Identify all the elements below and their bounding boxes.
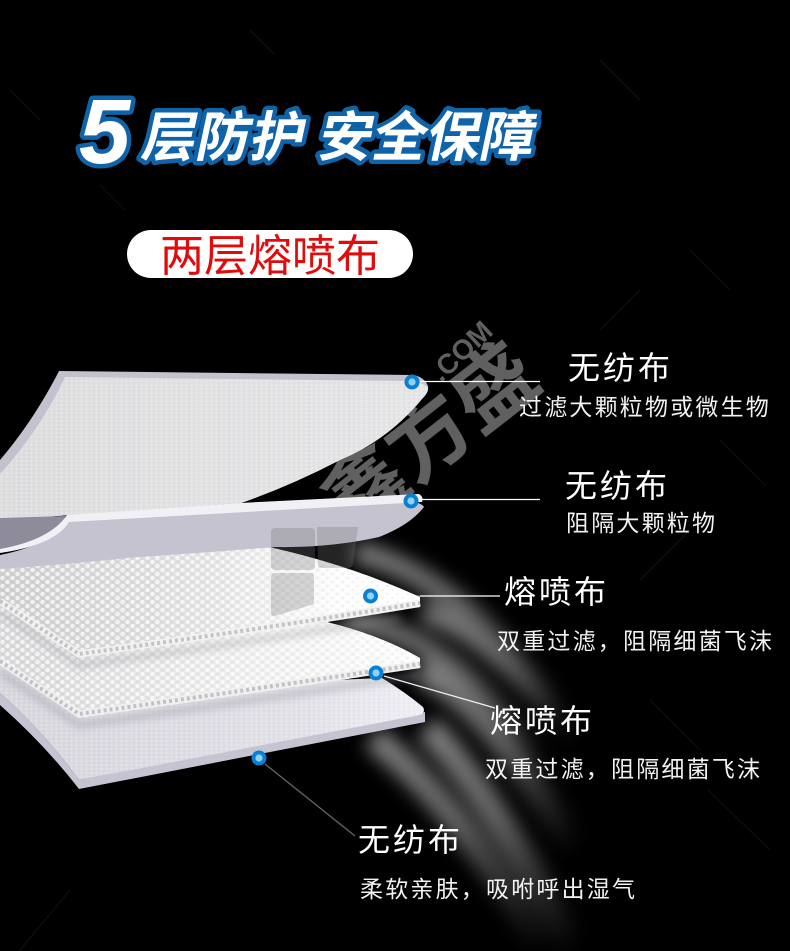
filter window logo squares xyxy=(271,527,358,616)
label: layer 1 xyxy=(519,350,771,420)
label: layer 2: 无纺布 xyxy=(565,468,670,504)
label: layer 4: 双重过滤，阻隔细菌飞沫 xyxy=(485,756,762,782)
numeral 5: 5 xyxy=(79,81,132,183)
title text: 安全保障 xyxy=(313,108,542,168)
label: layer 2: 阻隔大颗粒物 xyxy=(566,510,717,536)
layer 4: melt-blown xyxy=(0,600,420,718)
watermark: .COM xyxy=(424,315,499,387)
leader lines xyxy=(265,382,540,836)
label: layer 3: 熔喷布 xyxy=(504,574,609,610)
layer 2: curved non-woven band xyxy=(0,494,424,569)
label: layer 4: 熔喷布 xyxy=(490,703,595,739)
label: layer 2 xyxy=(565,468,717,536)
pill: two melt-blown layers: 两层熔喷布 xyxy=(160,232,380,281)
layer 1: top curved non-woven xyxy=(0,371,428,520)
label: layer 1: 无纺布 xyxy=(568,350,673,386)
label: layer 4 xyxy=(485,703,762,782)
layer 3: melt-blown xyxy=(0,547,420,658)
label: layer 3: 双重过滤，阻隔细菌飞沫 xyxy=(497,628,774,654)
label: layer 1: 过滤大颗粒物或微生物 xyxy=(519,394,771,420)
label: layer 3 xyxy=(497,574,774,654)
title text: 层防护 xyxy=(137,108,312,168)
markers: blue dots xyxy=(252,374,420,766)
watermark: 鑫方盛 xyxy=(305,327,555,550)
label: layer 5 xyxy=(358,822,637,902)
light beams xyxy=(345,552,575,950)
label: layer 5: 柔软亲肤，吸咐呼出湿气 xyxy=(360,876,637,902)
label: layer 5: 无纺布 xyxy=(358,822,463,858)
title text xyxy=(137,108,542,168)
title xyxy=(79,81,542,183)
layer 5: bottom non-woven xyxy=(0,655,425,789)
